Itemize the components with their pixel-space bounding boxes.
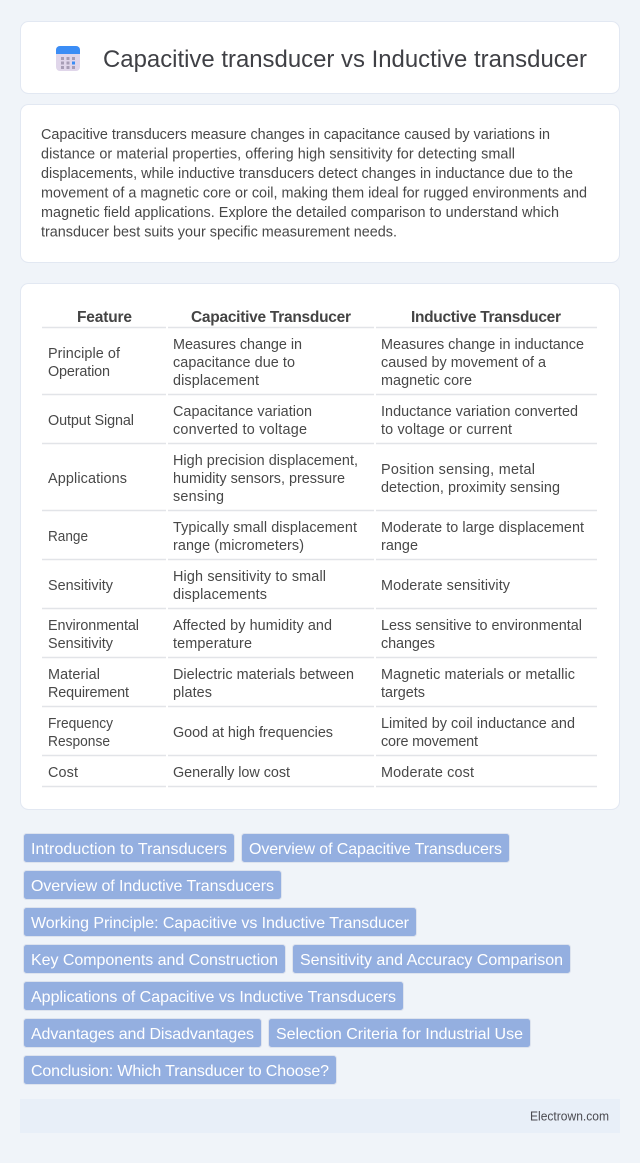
row: sensitivity: Sensitivity [48, 578, 114, 594]
tag [24, 1056, 336, 1084]
row: material requirement [48, 667, 575, 701]
tag: Sensitivity and Accuracy Comparison [300, 952, 563, 969]
row: output signal: Inductance variation converted [381, 404, 578, 420]
table header row: Inductive Transducer [411, 309, 561, 326]
table header row: Capacitive Transducer [191, 309, 351, 326]
row: material requirement: Requirement [48, 685, 129, 701]
tag: Introduction to Transducers [31, 841, 227, 858]
panel: comparison table [20, 284, 620, 810]
row: output signal: converted to voltage [173, 422, 307, 438]
row: frequency response: Good at high frequencies [173, 725, 333, 741]
row: output signal: to voltage or current [381, 422, 512, 438]
tag [292, 944, 570, 974]
row: frequency response: core movement [381, 734, 478, 750]
row: range: range [381, 538, 418, 554]
row: material requirement: targets [381, 685, 425, 701]
tag [24, 870, 282, 900]
row: principle of operation: Measures change in inductance [381, 337, 584, 353]
tag [24, 834, 234, 862]
row: frequency response [48, 716, 575, 750]
row: sensitivity: displacements [173, 587, 267, 603]
tag: Advantages and Disadvantages [31, 1026, 254, 1043]
row: applications: humidity sensors, pressure [173, 471, 345, 487]
row: applications: High precision displacement, [173, 453, 358, 469]
row: sensitivity: Moderate sensitivity [381, 578, 511, 594]
row: principle of operation: Principle of [48, 346, 121, 362]
row: material requirement: plates [173, 685, 212, 701]
row: applications [48, 453, 560, 505]
tag: Selection Criteria for Industrial Use [276, 1026, 523, 1043]
row: range: Range [48, 529, 88, 545]
title: Capacitive transducer vs Inductive transducer [103, 46, 587, 73]
row: principle of operation: magnetic core [381, 373, 472, 389]
row: applications: sensing [173, 489, 224, 505]
row: frequency response: Frequency [48, 716, 114, 732]
tag: Overview of Inductive Transducers [31, 878, 274, 895]
tag [24, 908, 416, 936]
tag [24, 1018, 262, 1048]
footer: Electrown.com [530, 1108, 609, 1124]
row: cost: Moderate cost [381, 765, 474, 781]
row: principle of operation: displacement [173, 373, 259, 389]
row: environmental sensitivity: Less sensitive to environmental [381, 618, 582, 634]
row: environmental sensitivity: changes [381, 636, 435, 652]
panel: introduction [20, 104, 620, 262]
tag: Key Components and Construction [31, 952, 278, 969]
table header row [77, 309, 561, 326]
row: sensitivity: High sensitivity to small [173, 569, 326, 585]
row: applications: detection, proximity sensing [381, 480, 560, 496]
row: applications: Applications [48, 471, 127, 487]
tag: Conclusion: Which Transducer to Choose? [31, 1063, 329, 1080]
row: range [48, 520, 584, 554]
intro paragraph [41, 127, 587, 240]
row: material requirement: Material [48, 667, 100, 683]
row: environmental sensitivity: Environmental [48, 618, 139, 634]
row: principle of operation: capacitance due to [173, 355, 295, 371]
table header row: Feature [77, 309, 132, 326]
tag [24, 944, 286, 974]
tag [24, 982, 404, 1010]
row: material requirement: Magnetic materials or metallic [381, 667, 575, 683]
row: cost: Cost [48, 765, 78, 781]
row: environmental sensitivity: Affected by humidity and [173, 618, 332, 634]
row: range: Typically small displacement [173, 520, 357, 536]
row: applications: Position sensing, metal [381, 462, 535, 478]
row: cost [48, 765, 474, 781]
row: cost: Generally low cost [173, 765, 290, 781]
tag: Overview of Capacitive Transducers [249, 841, 502, 858]
tag: Applications of Capacitive vs Inductive Transducers [31, 989, 396, 1006]
intro paragraph: transducer best suits your specific measurement needs. [41, 224, 397, 240]
row: output signal: Output Signal [48, 413, 134, 429]
row: material requirement: Dielectric materials between [173, 667, 354, 683]
tag [268, 1018, 530, 1048]
intro paragraph: magnetic field applications. Explore the detailed comparison to understand which [41, 205, 559, 221]
row: environmental sensitivity [48, 618, 582, 652]
row: environmental sensitivity: Sensitivity [48, 636, 114, 652]
row: principle of operation: Measures change in [173, 337, 302, 353]
header card [20, 22, 620, 94]
row: frequency response: Limited by coil inductance and [381, 716, 575, 732]
tag [242, 834, 510, 862]
footer [20, 1099, 620, 1133]
row: principle of operation [48, 337, 584, 389]
row: range: range (micrometers) [173, 538, 304, 554]
row: sensitivity [48, 569, 511, 603]
topic tags [24, 834, 570, 1084]
intro paragraph: movement of a magnetic core or coil, making them ideal for rugged environments and [41, 186, 587, 202]
row: output signal: Capacitance variation [173, 404, 312, 420]
tag: Working Principle: Capacitive vs Inductive Transducer [31, 915, 410, 932]
intro paragraph: Capacitive transducers measure changes in capacitance caused by variations in [41, 127, 550, 143]
row: environmental sensitivity: temperature [173, 636, 252, 652]
intro paragraph: displacements, while inductive transducers detect changes in inductance due to the [41, 166, 573, 182]
icon: calendar grid [56, 46, 80, 71]
row: principle of operation: caused by movement of a [381, 355, 546, 371]
row: output signal [48, 404, 578, 438]
intro paragraph: distance or material properties, offering high sensitivity for detecting small [41, 146, 515, 162]
row: range: Moderate to large displacement [381, 520, 584, 536]
row: principle of operation: Operation [48, 364, 110, 380]
row: frequency response: Response [48, 734, 110, 750]
